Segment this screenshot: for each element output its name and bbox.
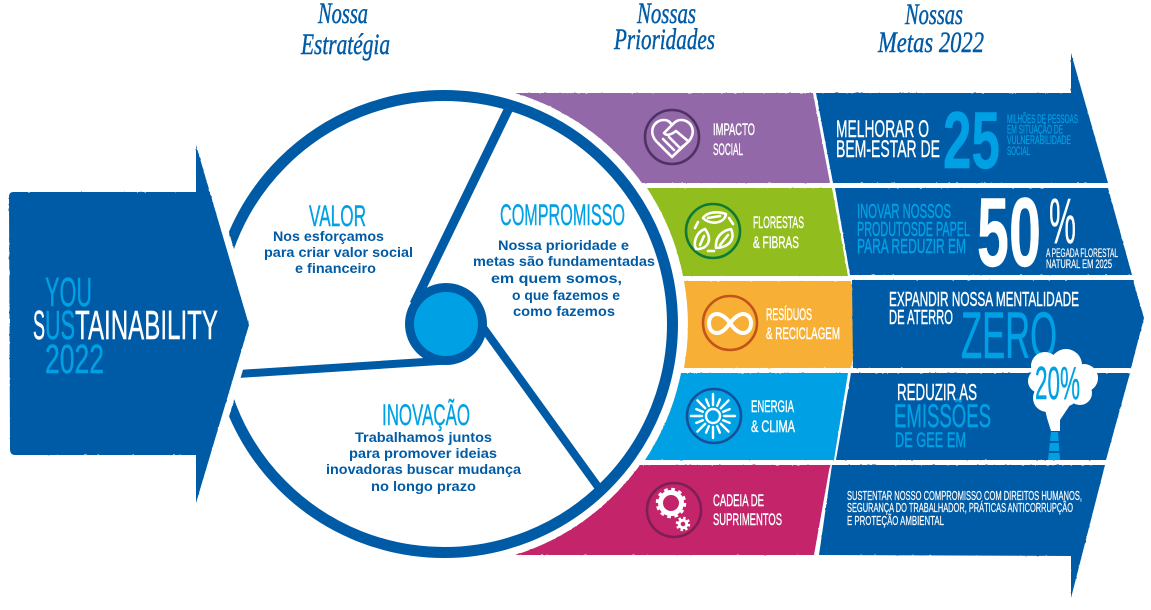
panel: Impacto Social [515, 93, 830, 183]
label: SUSTAINABILITY: US [45, 302, 75, 348]
text block: Compromisso: Nossa prioridade e [498, 238, 630, 253]
text block: Compromisso: como fazemos [513, 304, 615, 319]
text block: Compromisso: COMPROMISSO [500, 199, 625, 232]
text block: Valor: Nos esforçamos [273, 229, 384, 244]
text block: Valor: e financeiro [295, 261, 376, 276]
text block: Compromisso: metas são fundamentadas [473, 254, 655, 269]
panel: Florestas e Fibras [647, 188, 848, 276]
panel: meta aterro zero [852, 280, 1144, 372]
text: milhões de pessoas: EM SITUAÇÃO DE [1007, 124, 1063, 136]
number: 50%: 50 [977, 177, 1041, 287]
icon: smoke cloud with 20%: 20% [1035, 357, 1080, 409]
text: Inovar nossos produtos: PARA REDUZIR EM [857, 236, 966, 258]
label: Energia e Clima: & CLIMA [751, 417, 795, 436]
text block: Inovação: para promover ideias [349, 446, 497, 461]
icon: heart handshake [645, 110, 699, 164]
label: Cadeia de Suprimentos [713, 491, 782, 529]
icon: smoke cloud with 20% [1028, 349, 1098, 431]
text: Melhorar o bem-estar de: BEM-ESTAR DE [836, 136, 940, 163]
text: Sustentar nosso compromisso: E PROTEÇÃO AMBIENTAL [847, 513, 944, 528]
strategy circle [216, 96, 672, 552]
spoke: left [238, 358, 455, 378]
panel: meta 50% [835, 177, 1132, 287]
panel: Resíduos e Reciclagem [684, 281, 860, 368]
label: Florestas e Fibras [753, 213, 804, 252]
icon: sun [687, 389, 741, 443]
icon: chimney [1048, 432, 1060, 460]
left arrow: You Sustainability 2022 [9, 145, 249, 503]
heading: Nossas Metas 2022: Metas 2022 [877, 26, 984, 59]
label: 2022: 2022 [45, 336, 104, 382]
panel: Cadeia de Suprimentos [515, 465, 830, 555]
text: Inovar nossos produtos [857, 201, 970, 258]
text: a pegada florestal: NATURAL EM 2025 [1046, 257, 1112, 271]
spoke: top right [414, 106, 510, 304]
text: milhões de pessoas [1007, 113, 1078, 158]
text block: Valor: para criar valor social [264, 245, 413, 260]
label: Impacto Social: SOCIAL [713, 140, 743, 159]
icon: recycling leaves [686, 204, 740, 258]
heading: Nossa Estratégia: Estratégia [300, 28, 390, 61]
icon: infinity [703, 296, 757, 350]
text: milhões de pessoas: MILHÕES DE PESSOAS [1007, 113, 1078, 126]
label: Energia e Clima: ENERGIA [751, 397, 794, 416]
label: SUSTAINABILITY: TAINABILITY [75, 302, 218, 348]
heading: Nossas Prioridades [613, 0, 715, 56]
text block: Compromisso: em quem somos, [491, 271, 622, 286]
text: Reduzir as emissões: DE GEE EM [895, 429, 966, 452]
number: 25: 25 [943, 96, 1000, 186]
text block: Inovação: no longo prazo [371, 479, 476, 494]
text: Inovar nossos produtos: PRODUTOSDE PAPEL [857, 219, 970, 241]
text: Melhorar o bem-estar de: MELHORAR O [836, 116, 929, 143]
heading: Nossas Metas 2022 [877, 0, 984, 59]
panel: meta 25 milhões [816, 53, 1108, 186]
spoke: lower right [482, 326, 601, 491]
panel: meta direitos humanos [819, 465, 1105, 598]
label: Cadeia de Suprimentos: SUPRIMENTOS [713, 510, 782, 529]
panel: meta 50%: % [1049, 185, 1076, 257]
text: milhões de pessoas: SOCIAL [1007, 146, 1030, 158]
text block: Compromisso: o que fazemos e [512, 288, 621, 303]
text: Sustentar nosso compromisso [847, 488, 1082, 528]
text: milhões de pessoas: VULNERABILIDADE [1007, 135, 1071, 147]
label: Florestas e Fibras: FLORESTAS [753, 213, 804, 232]
panel: meta emissões [836, 349, 1130, 460]
text: Expandir nossa mentalidade [889, 289, 1079, 329]
text block: Compromisso [473, 199, 655, 319]
text block: Inovação: Trabalhamos juntos [355, 430, 492, 445]
label: Resíduos e Reciclagem: & RECICLAGEM [766, 324, 840, 343]
label: SUSTAINABILITY [33, 302, 218, 348]
label: YOU: YOU [45, 269, 92, 315]
label: Impacto Social [713, 120, 755, 159]
text: Reduzir as emissões: REDUZIR AS [897, 379, 977, 405]
text block: Inovação: INOVAÇÃO [382, 398, 470, 432]
label: Impacto Social: IMPACTO [713, 120, 755, 139]
text: Reduzir as emissões: EMISSÕES [894, 398, 991, 434]
text: Inovar nossos produtos: INOVAR NOSSOS [857, 201, 951, 223]
hub [405, 283, 487, 365]
heading: Nossa Estratégia [300, 0, 390, 61]
label: Resíduos e Reciclagem [766, 305, 840, 343]
number: Zero: ZERO [961, 298, 1057, 372]
label: SUSTAINABILITY: S [33, 302, 45, 348]
label: Energia e Clima [751, 397, 795, 436]
text block: Valor [264, 200, 413, 276]
text: Melhorar o bem-estar de [836, 116, 940, 163]
text: a pegada florestal [1046, 246, 1118, 271]
text block: Inovação [326, 398, 522, 494]
text block: Valor: VALOR [309, 200, 366, 233]
label: Cadeia de Suprimentos: CADEIA DE [713, 491, 764, 510]
text: Reduzir as emissões [894, 379, 991, 452]
label: Florestas e Fibras: & FIBRAS [753, 233, 799, 252]
icon: gears [647, 483, 701, 537]
text block: Inovação: inovadoras buscar mudança [326, 462, 522, 477]
heading: Nossas Prioridades: Prioridades [613, 23, 715, 56]
panel: Energia e Clima [645, 373, 848, 460]
text: Expandir nossa mentalidade: DE ATERRO [889, 307, 953, 329]
label: Resíduos e Reciclagem: RESÍDUOS [766, 305, 812, 324]
